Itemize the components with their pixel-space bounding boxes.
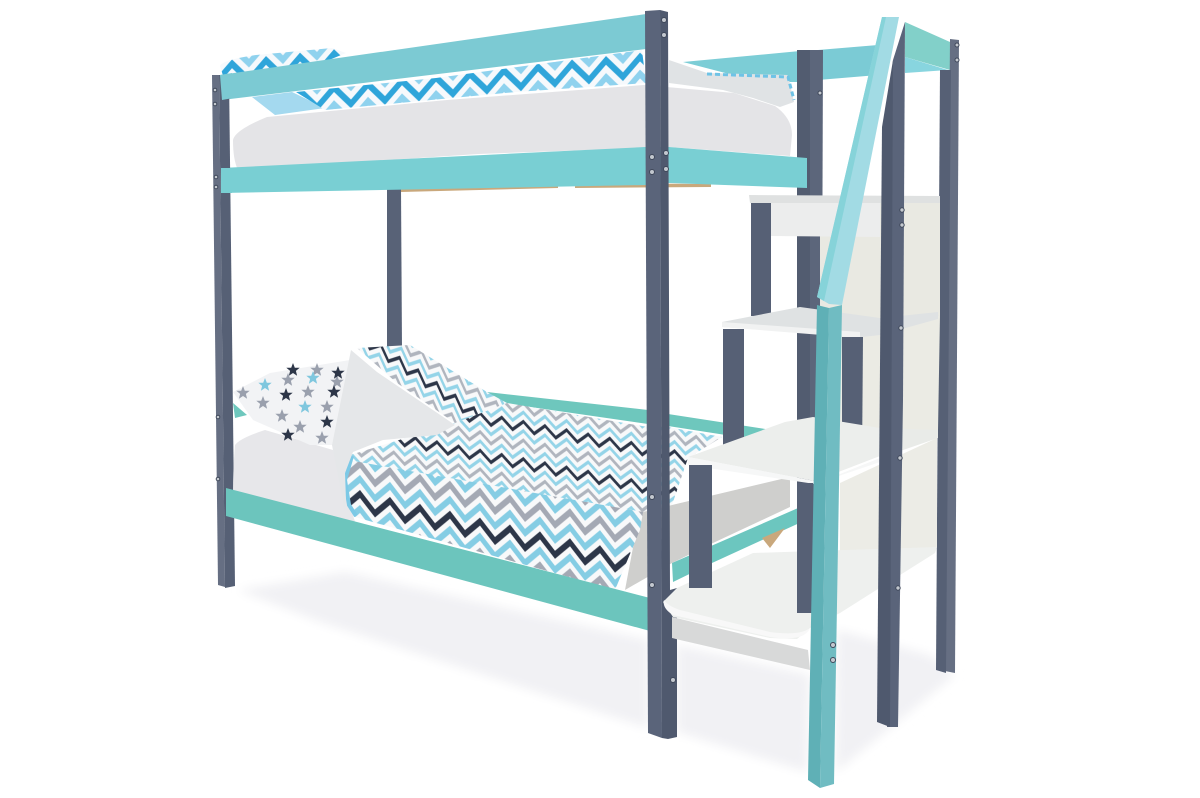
lower back rail — [233, 392, 772, 438]
left front post — [212, 75, 235, 588]
lower mattress right side — [625, 477, 790, 590]
handrail post — [808, 305, 842, 788]
upper bedding: pillow below guard rail — [252, 92, 325, 115]
stair top step — [749, 195, 940, 237]
blanket front drape — [346, 460, 643, 590]
back left post — [387, 188, 402, 350]
top guard rail — [220, 14, 646, 100]
stair third step — [688, 417, 938, 484]
stair bottom step — [663, 547, 937, 639]
blanket fold underside — [332, 350, 455, 512]
top end rail — [905, 22, 950, 73]
upper blanket strip — [296, 50, 646, 110]
upper blanket fold right — [669, 60, 794, 107]
lower mattress — [233, 430, 356, 525]
lower front rail — [226, 488, 806, 631]
rear mid post — [797, 50, 823, 620]
bottom step underside — [672, 617, 810, 670]
upper slats — [401, 183, 711, 192]
top step leg — [751, 203, 771, 316]
upper bedding: pillow behind guard rail — [220, 48, 346, 82]
rear upper rail — [683, 45, 878, 82]
upper front rail — [221, 147, 807, 193]
upper rail overlap on left post — [221, 168, 232, 193]
stair back panels — [820, 203, 940, 590]
blanket blue edge — [345, 456, 356, 516]
blanket flat top — [350, 403, 722, 512]
second step legs — [723, 329, 863, 463]
far right stair post — [936, 39, 959, 673]
lower step legs — [689, 465, 813, 613]
stair second step — [722, 307, 938, 338]
blanket fold chevron part — [357, 345, 507, 423]
teal rail overlap on left post — [220, 73, 233, 100]
bolts — [213, 18, 959, 682]
star pillow — [233, 360, 350, 445]
diagonal handrail — [817, 17, 899, 305]
upper mattress — [233, 85, 792, 170]
front stair post — [877, 22, 905, 727]
floor shadow — [238, 572, 955, 772]
main front post — [645, 10, 677, 739]
